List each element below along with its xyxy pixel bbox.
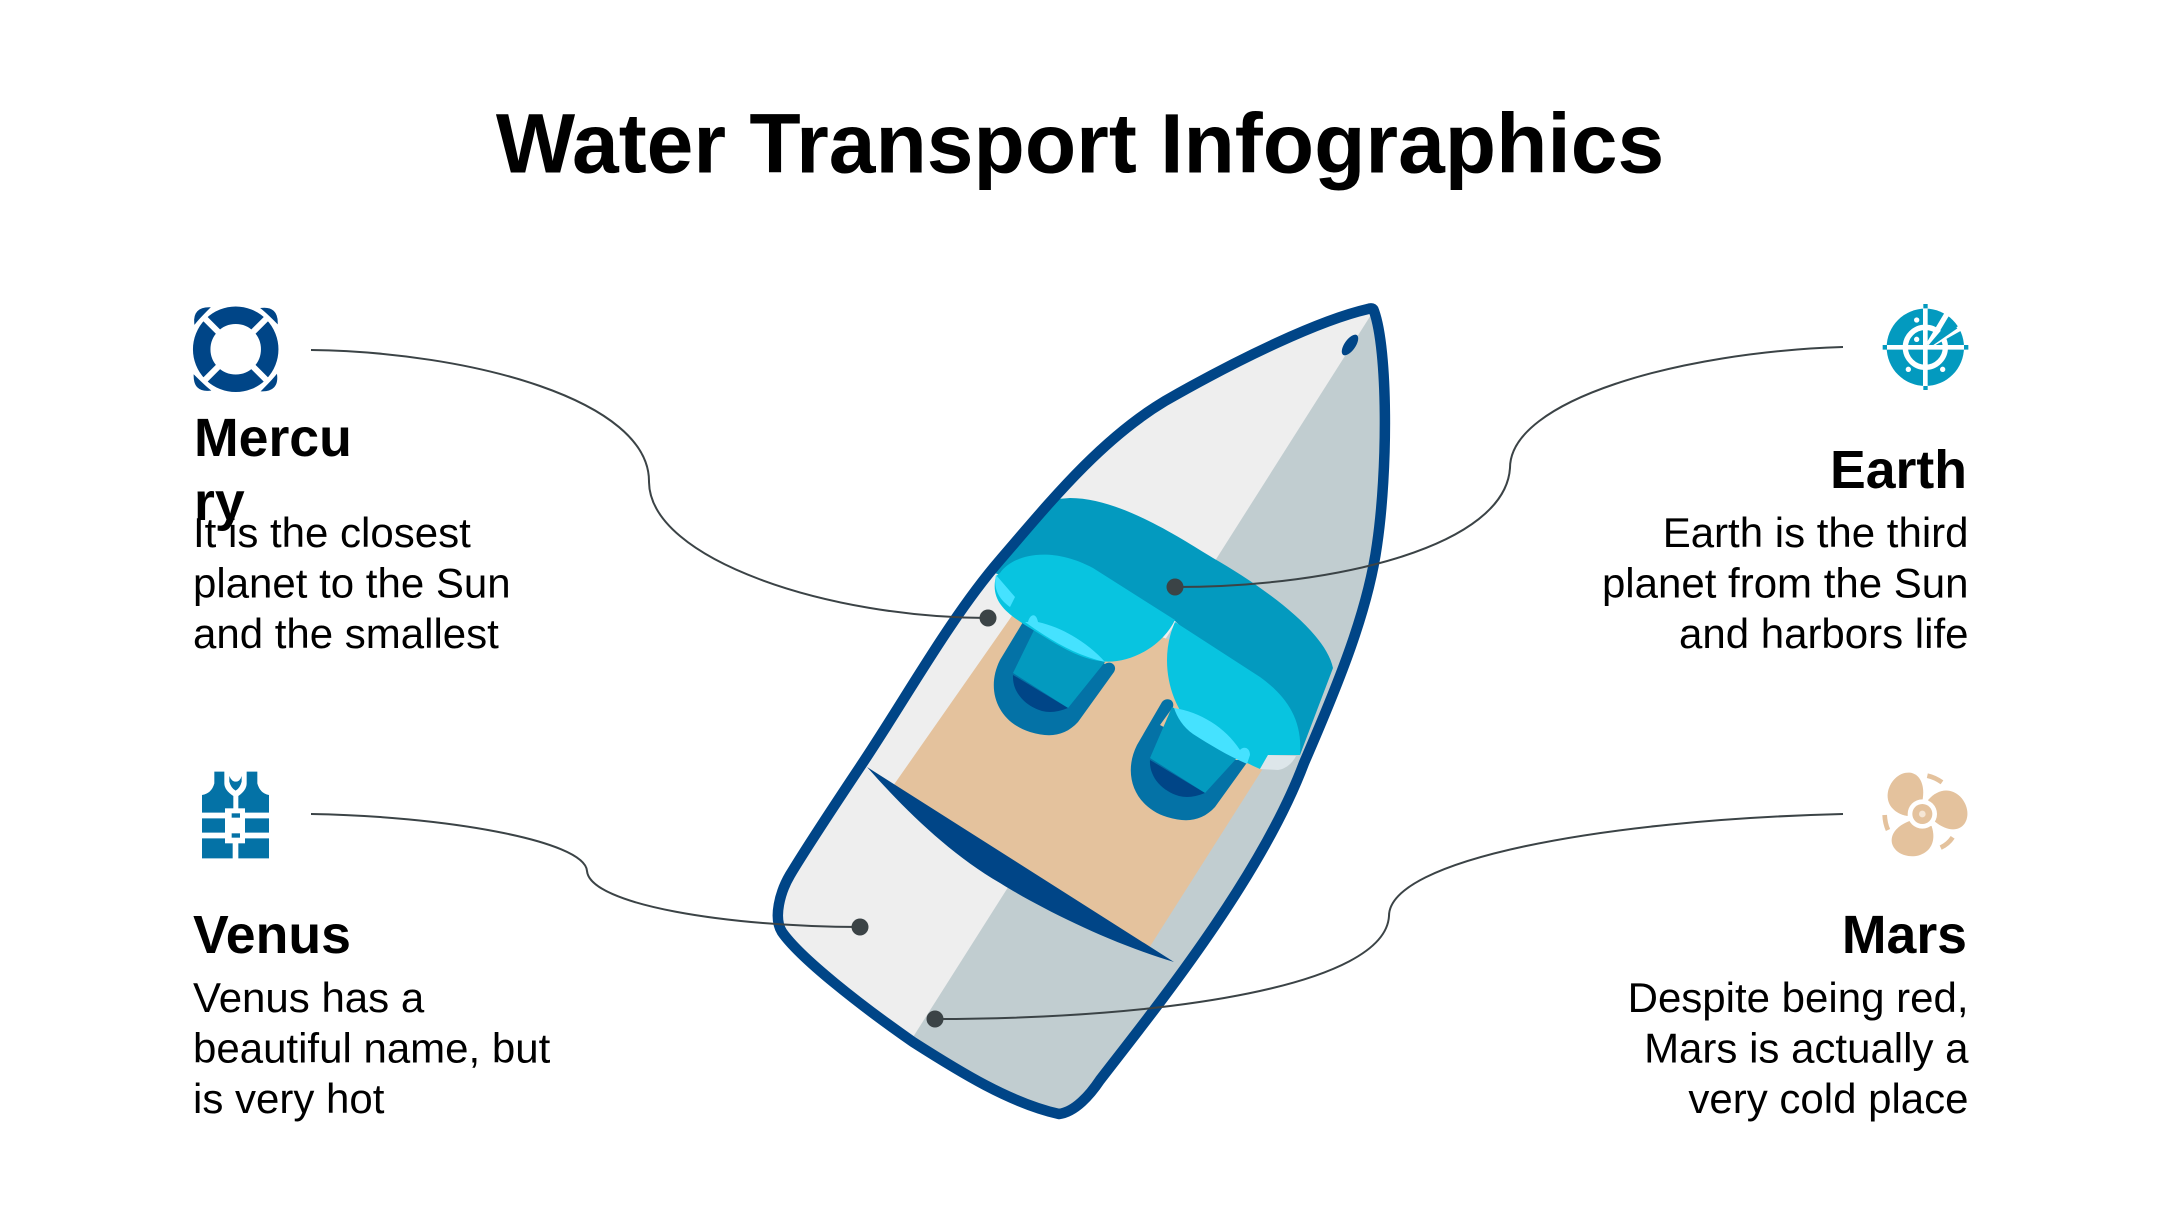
body: Earth: Earth is the third — [1663, 509, 1968, 556]
body: Mercury: and the smallest — [193, 610, 499, 657]
boat illustration — [778, 307, 1420, 1140]
hull shaded half — [914, 316, 1380, 1108]
connector: Mercury — [311, 350, 996, 626]
cockpit floor — [893, 590, 1262, 948]
heading: Mars: Mars — [1842, 905, 1967, 965]
body: Mercury: planet to the Sun — [193, 560, 511, 606]
icon: propeller — [1885, 773, 1976, 865]
right windshield highlight — [1174, 708, 1260, 769]
bow hole — [1339, 332, 1361, 358]
left seat shadow — [1013, 675, 1068, 712]
left seat cushion — [1013, 628, 1105, 708]
connector: Mars — [926, 814, 1843, 1028]
text block: Mars — [1628, 905, 1969, 1122]
bow stripe — [867, 767, 1174, 962]
hull outline — [778, 308, 1385, 1114]
windshield back band — [960, 498, 1333, 755]
heading: Venus: Venus — [193, 905, 351, 965]
left windshield highlight — [995, 575, 1105, 662]
body: Earth: and harbors life — [1679, 610, 1968, 657]
heading: Mercury: Mercu — [194, 408, 352, 468]
body: Earth: planet from the Sun — [1602, 560, 1968, 606]
windshield corner — [1260, 755, 1296, 770]
left windshield glass — [995, 555, 1175, 662]
right seat frame — [1131, 699, 1251, 820]
body: Venus: beautiful name, but — [193, 1024, 551, 1072]
left seat — [994, 622, 1115, 735]
left seat frame — [994, 622, 1115, 735]
connector: Venus — [311, 814, 868, 936]
hull deck base — [778, 308, 1385, 1114]
heading overflow: Mercury: ry — [194, 472, 245, 532]
text block: Venus — [193, 905, 551, 1122]
right seat cushion — [1150, 707, 1247, 793]
text block: Mercury — [193, 408, 511, 657]
body: Mars: Mars is actually a — [1644, 1024, 1969, 1072]
icon: lifebuoy — [194, 308, 277, 391]
right windshield glass — [1167, 622, 1300, 769]
body: Venus: is very hot — [193, 1075, 385, 1122]
heading: Earth: Earth — [1830, 440, 1967, 500]
icon: radar — [1883, 304, 1968, 390]
right seat — [1131, 699, 1251, 820]
icon: life vest — [202, 772, 269, 858]
body: Mars: Despite being red, — [1628, 974, 1968, 1021]
title: Water Transport Infographics — [496, 96, 1664, 190]
right seat shadow — [1150, 760, 1205, 797]
connector: Earth — [1166, 347, 1843, 596]
body: Mercury: It is the closest — [193, 509, 471, 556]
body: Venus: Venus has a — [193, 974, 425, 1021]
body: Mars: very cold place — [1688, 1075, 1968, 1122]
text block: Earth — [1602, 440, 1968, 657]
